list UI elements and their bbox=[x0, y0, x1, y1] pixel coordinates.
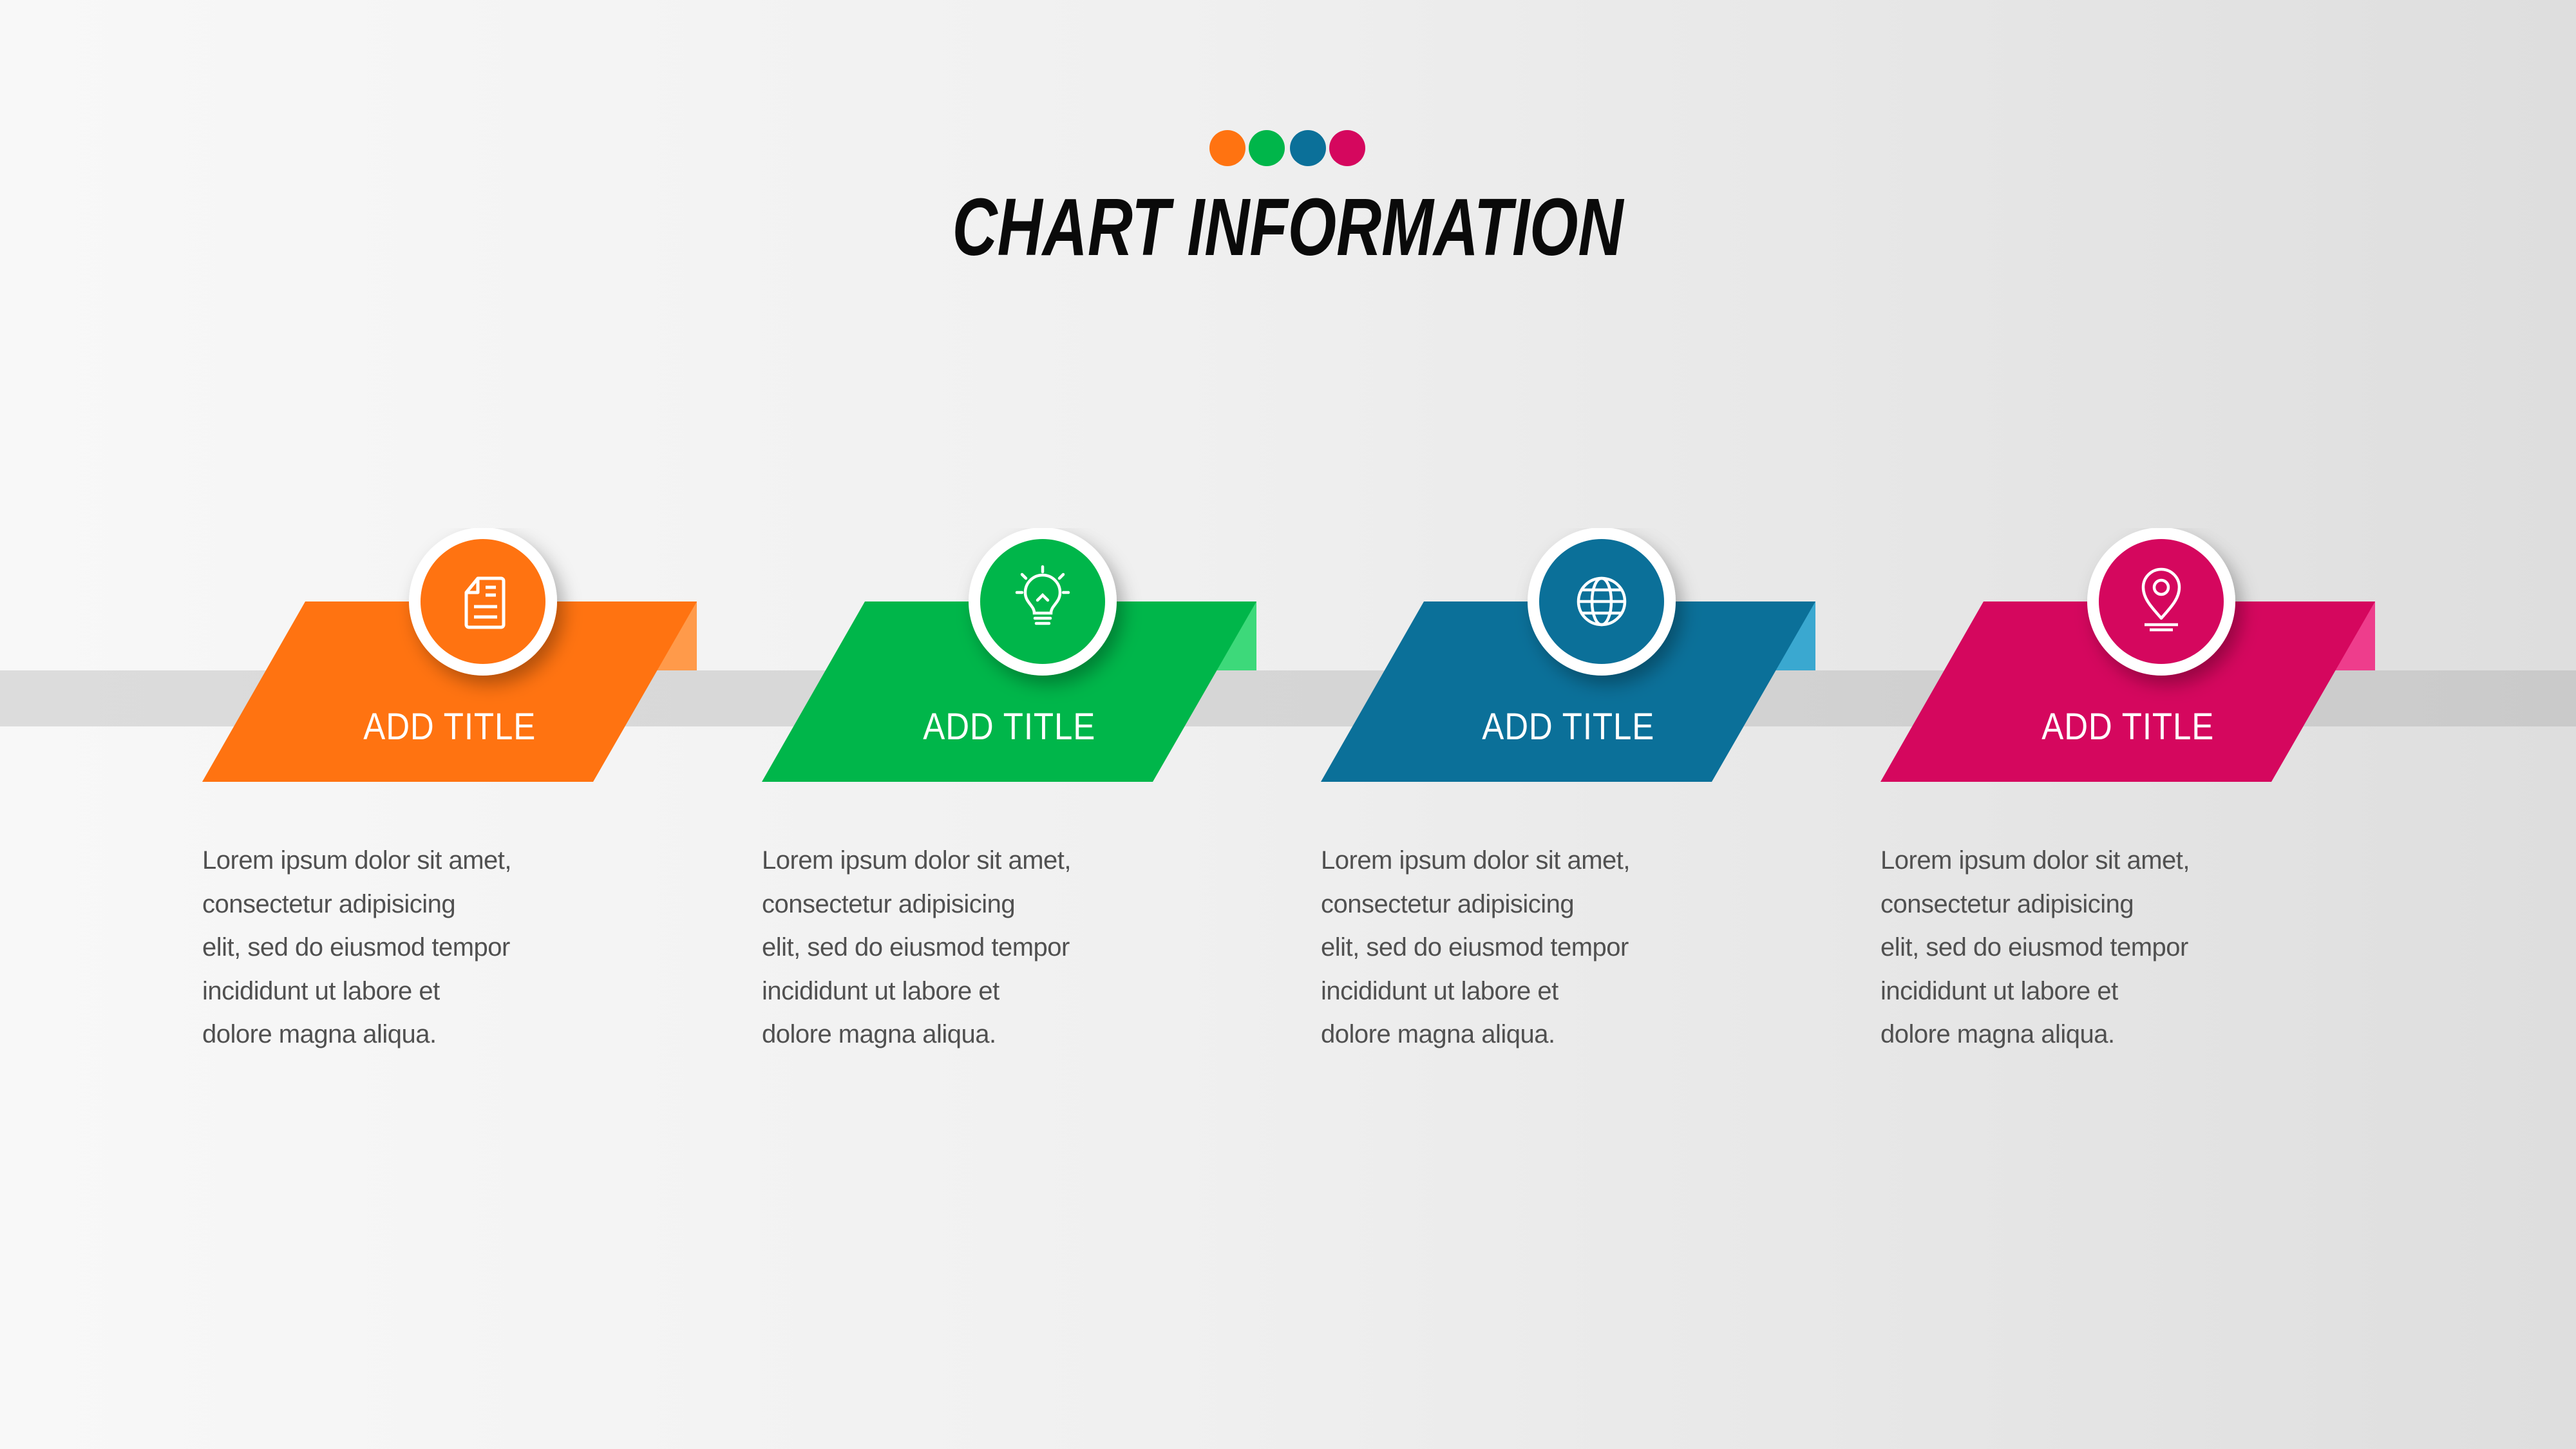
card 1: orange: ADD TITLE bbox=[363, 706, 536, 748]
card 1: orange bbox=[202, 528, 697, 782]
text block 2 bbox=[762, 846, 1071, 1048]
text block 3 bbox=[1321, 846, 1630, 1048]
text block 1 bbox=[202, 846, 511, 1048]
text block 4: elit, sed do eiusmod tempor bbox=[1880, 933, 2188, 961]
title: CHART INFORMATION bbox=[952, 182, 1624, 272]
card 4: pink bbox=[1880, 528, 2375, 782]
text block 1: incididunt ut labore et bbox=[202, 976, 440, 1005]
text block 1: Lorem ipsum dolor sit amet, bbox=[202, 846, 511, 875]
text block 2: dolore magna aliqua. bbox=[762, 1020, 996, 1048]
text block 2: incididunt ut labore et bbox=[762, 976, 999, 1005]
card 2: green bbox=[762, 528, 1256, 782]
text block 4: incididunt ut labore et bbox=[1880, 976, 2118, 1005]
text block 1: elit, sed do eiusmod tempor bbox=[202, 933, 510, 961]
text block 2: elit, sed do eiusmod tempor bbox=[762, 933, 1070, 961]
decorative dots bbox=[1209, 130, 1365, 166]
card 3: blue bbox=[1321, 528, 1815, 782]
icon: globe bbox=[1578, 578, 1625, 625]
text block 3: incididunt ut labore et bbox=[1321, 976, 1558, 1005]
text block 3: Lorem ipsum dolor sit amet, bbox=[1321, 846, 1630, 875]
gray timeline band bbox=[0, 670, 2576, 726]
text block 3: elit, sed do eiusmod tempor bbox=[1321, 933, 1629, 961]
text block 4: consectetur adipisicing bbox=[1880, 890, 2134, 918]
text block 1: consectetur adipisicing bbox=[202, 890, 455, 918]
text block 4: dolore magna aliqua. bbox=[1880, 1020, 2115, 1048]
icon: document bbox=[466, 578, 504, 627]
card 3: blue: ADD TITLE bbox=[1482, 706, 1654, 748]
text block 1: dolore magna aliqua. bbox=[202, 1020, 437, 1048]
text block 2: consectetur adipisicing bbox=[762, 890, 1015, 918]
text block 3: dolore magna aliqua. bbox=[1321, 1020, 1555, 1048]
icon: light bulb bbox=[1017, 567, 1068, 623]
card 4: pink: ADD TITLE bbox=[2041, 706, 2214, 748]
text block 4: Lorem ipsum dolor sit amet, bbox=[1880, 846, 2190, 875]
text block 2: Lorem ipsum dolor sit amet, bbox=[762, 846, 1071, 875]
card 2: green: ADD TITLE bbox=[923, 706, 1095, 748]
text block 4 bbox=[1880, 846, 2190, 1048]
icon: map pin bbox=[2143, 569, 2179, 630]
text block 3: consectetur adipisicing bbox=[1321, 890, 1574, 918]
